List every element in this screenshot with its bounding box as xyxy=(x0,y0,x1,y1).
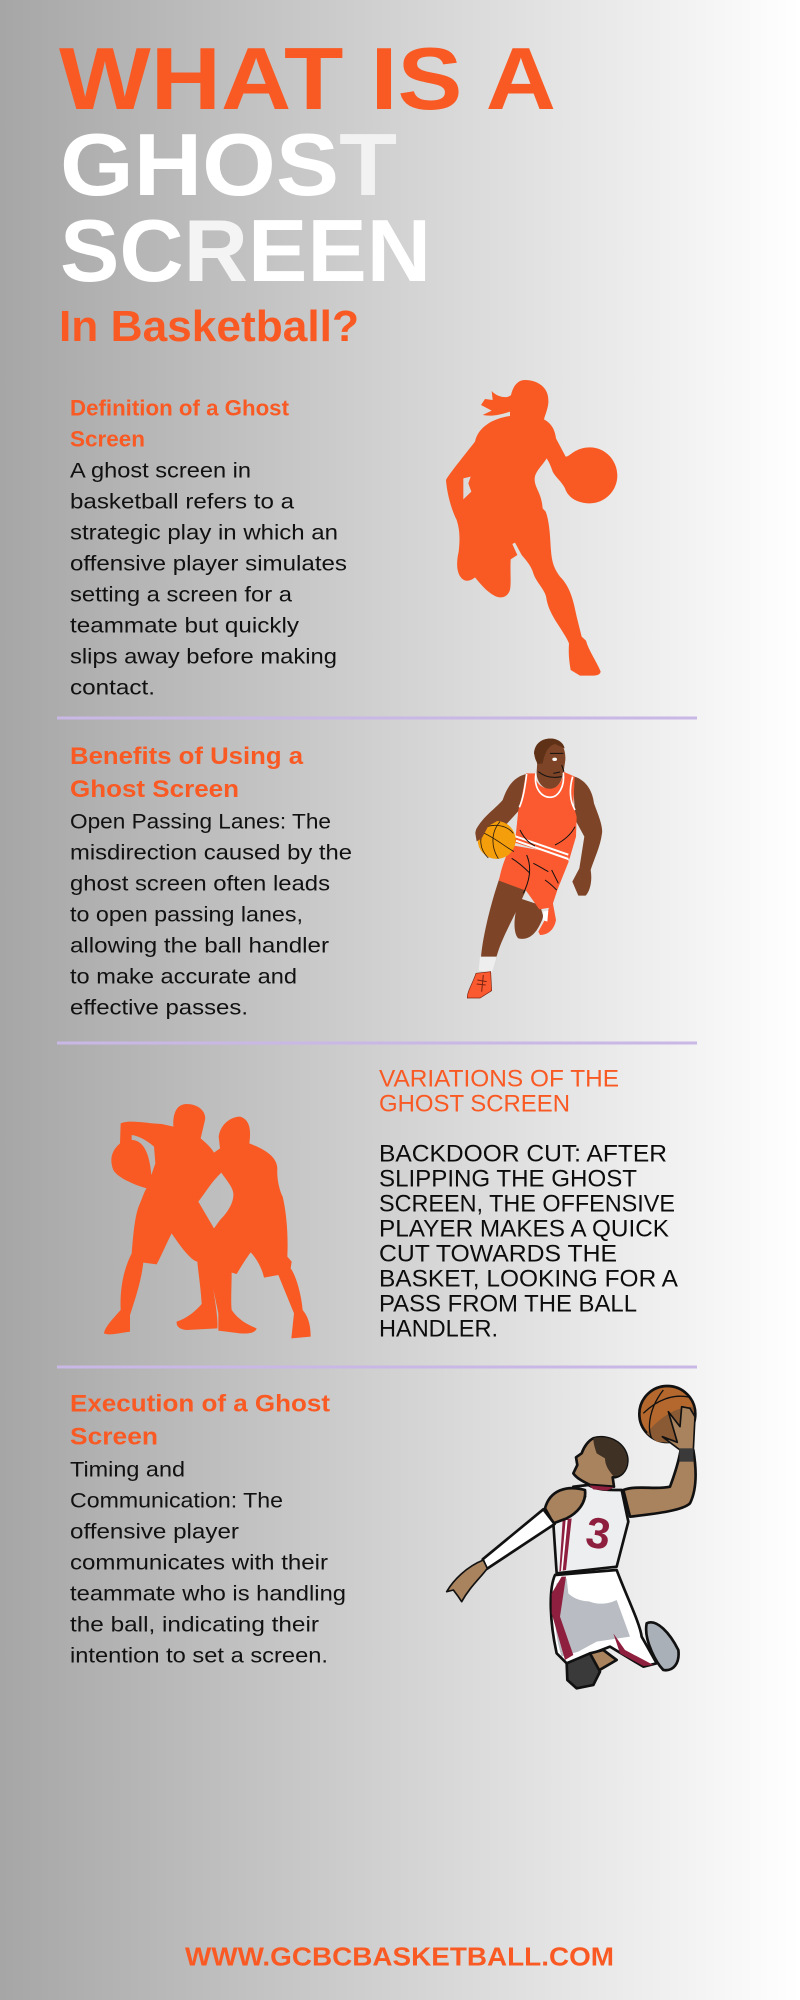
text block: benefits: Open Passing Lanes: The xyxy=(70,809,331,833)
heading: benefits of using a ghost screen: Benefits of Using a xyxy=(70,743,304,770)
text block: variations: BASKET, LOOKING FOR A xyxy=(379,1266,678,1293)
panel: variations xyxy=(104,1066,678,1343)
heading: variations of the ghost screen: VARIATIONS OF THE xyxy=(379,1066,619,1093)
title line: what is a: WHAT IS A xyxy=(59,29,556,128)
text block: execution: teammate who is handling xyxy=(70,1582,346,1606)
text block: definition: A ghost screen in xyxy=(70,459,251,483)
text block: variations: HANDLER. xyxy=(379,1316,498,1343)
icon: female player silhouette dribbling xyxy=(446,380,617,676)
title line: ghost: GHOST xyxy=(60,115,397,214)
text block: benefits: to make accurate and xyxy=(70,964,297,988)
text block: execution: intention to set a screen. xyxy=(70,1644,328,1668)
text block: benefits: ghost screen often leads xyxy=(70,871,330,895)
text block: definition xyxy=(70,459,347,700)
text block: definition: strategic play in which an xyxy=(70,521,338,545)
heading: benefits of using a ghost screen: Ghost Screen xyxy=(70,776,239,803)
heading: definition of a ghost screen xyxy=(70,396,290,452)
text block: execution: communicates with their xyxy=(70,1551,328,1575)
subtitle: In Basketball? xyxy=(59,302,359,351)
icon: illustrated player in orange kit dribbling xyxy=(467,739,602,998)
text block: variations: SCREEN, THE OFFENSIVE xyxy=(379,1191,675,1218)
text block: execution xyxy=(70,1458,346,1668)
text block: benefits: misdirection caused by the xyxy=(70,840,352,864)
heading: benefits of using a ghost screen xyxy=(70,743,304,803)
heading: execution of a ghost screen: Screen xyxy=(70,1424,158,1450)
heading: definition of a ghost screen: Definition of a Ghost xyxy=(70,396,290,421)
text block: benefits: effective passes. xyxy=(70,995,248,1019)
text block: definition: contact. xyxy=(70,676,155,700)
text block: variations xyxy=(379,1141,678,1343)
heading: variations of the ghost screen: GHOST SCREEN xyxy=(379,1091,570,1118)
text block: variations: SLIPPING THE GHOST xyxy=(379,1166,637,1193)
text block: execution: the ball, indicating their xyxy=(70,1613,319,1637)
text block: definition: slips away before making xyxy=(70,645,337,669)
title line: screen: SCREEN xyxy=(60,201,431,300)
text block: definition: setting a screen for a xyxy=(70,583,292,607)
title xyxy=(59,29,556,351)
text block: variations: PLAYER MAKES A QUICK xyxy=(379,1216,669,1243)
heading: definition of a ghost screen: Screen xyxy=(70,427,145,452)
panel: benefits xyxy=(70,739,602,1019)
panel: definition xyxy=(70,380,617,700)
heading: execution of a ghost screen: Execution of a Ghost xyxy=(70,1391,330,1418)
heading: execution of a ghost screen xyxy=(70,1391,330,1450)
text block: benefits xyxy=(70,809,352,1019)
text block: definition: teammate but quickly xyxy=(70,614,299,638)
text block: execution: Communication: The xyxy=(70,1489,283,1513)
text block: execution: offensive player xyxy=(70,1520,239,1544)
icon: two players silhouette xyxy=(104,1104,311,1338)
text block: benefits: to open passing lanes, xyxy=(70,902,303,926)
text block: definition: basketball refers to a xyxy=(70,490,294,514)
icon: illustrated player number 3 dunking xyxy=(447,1386,696,1688)
text block: definition: offensive player simulates xyxy=(70,552,347,576)
text block: execution: Timing and xyxy=(70,1458,185,1482)
text block: variations: BACKDOOR CUT: AFTER xyxy=(379,1141,667,1168)
panel: execution xyxy=(70,1386,696,1688)
text block: variations: CUT TOWARDS THE xyxy=(379,1241,617,1268)
footer url: WWW.GCBCBASKETBALL.COM xyxy=(185,1942,614,1972)
icon: illustrated player number 3 dunking: 3 xyxy=(583,1509,613,1560)
text block: variations: PASS FROM THE BALL xyxy=(379,1291,637,1318)
text block: benefits: allowing the ball handler xyxy=(70,933,329,957)
heading: variations of the ghost screen xyxy=(379,1066,619,1118)
